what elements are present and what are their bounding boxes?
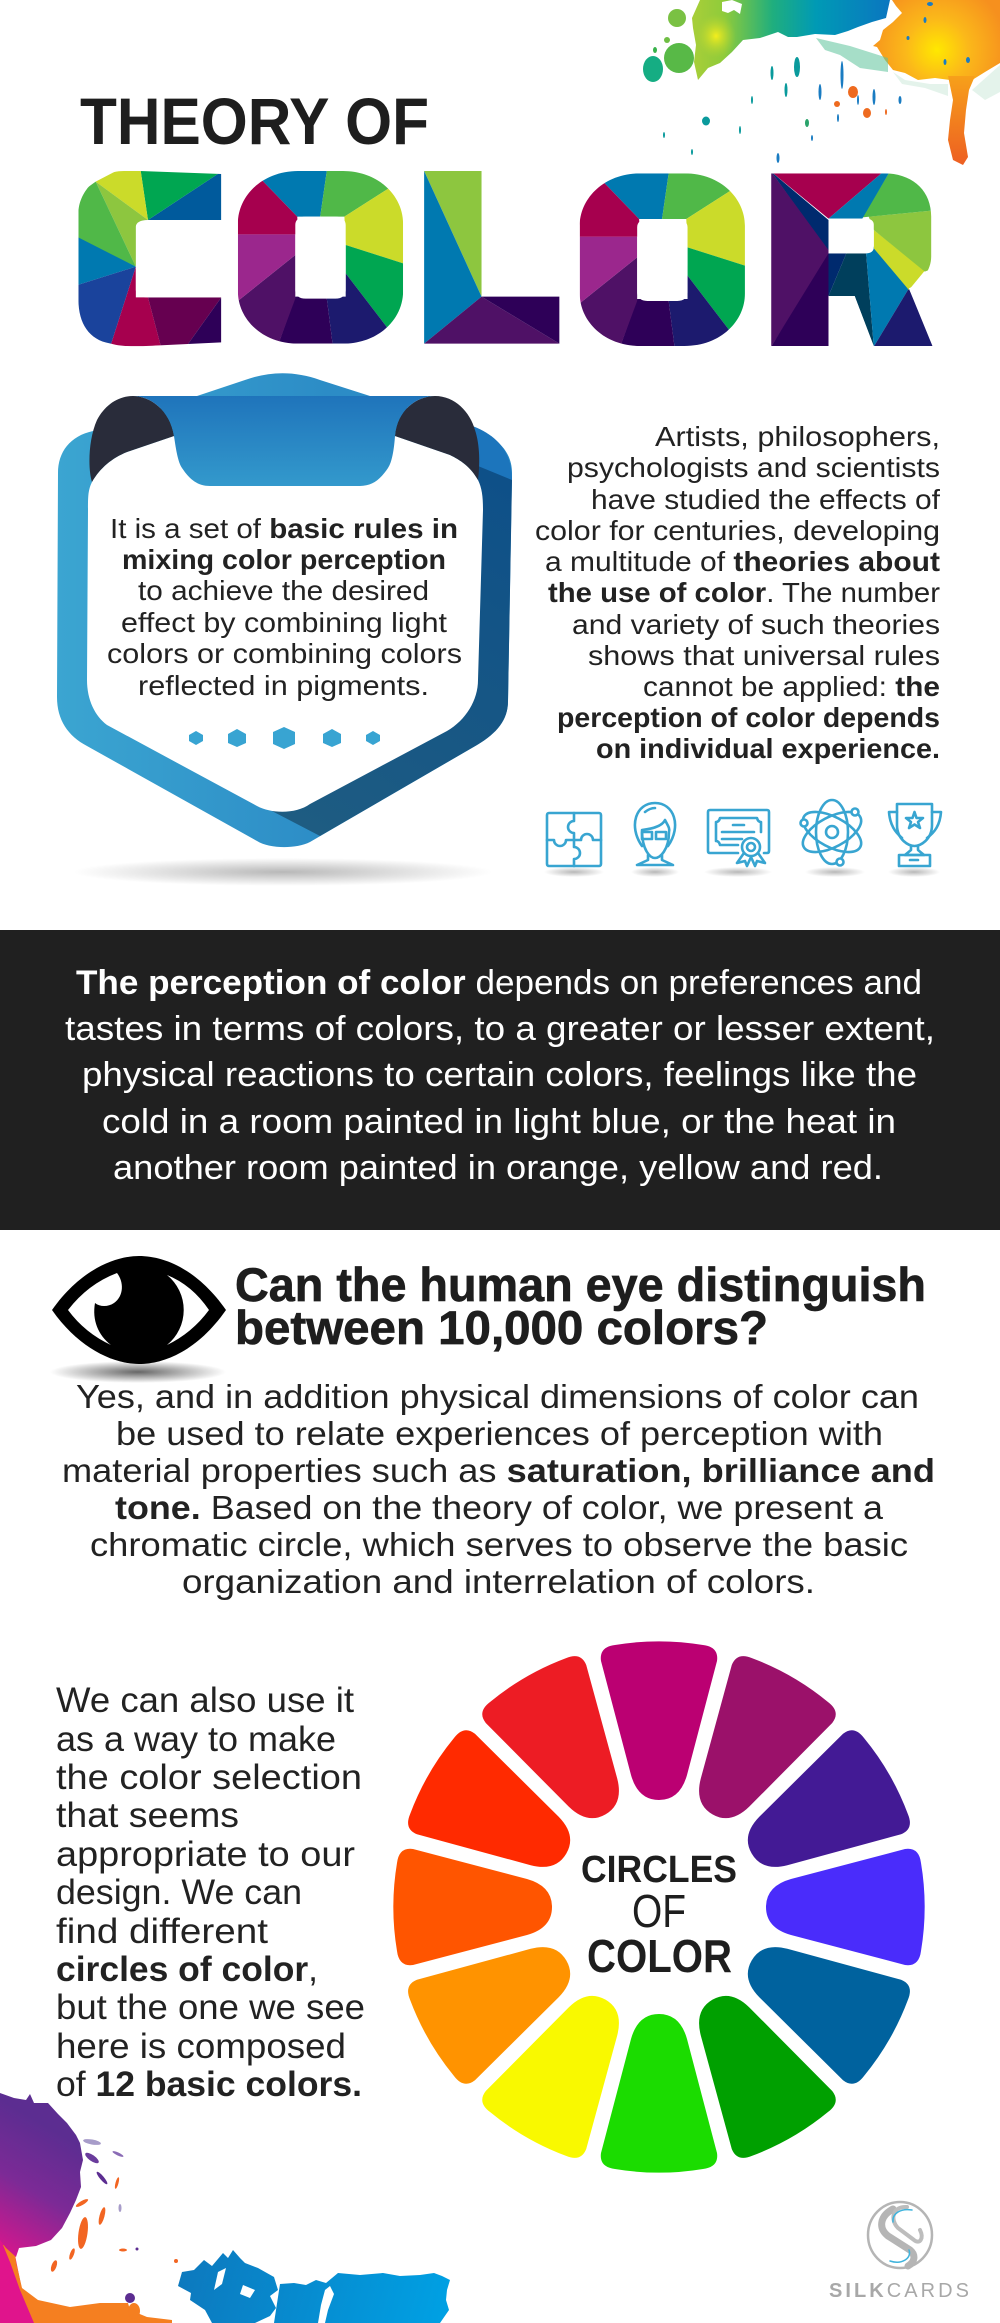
splash: speckle cloud <box>816 38 888 72</box>
wheel wedge: red orange <box>400 1724 595 1904</box>
wheel center label: COLOR <box>587 1930 732 1982</box>
logo wordmark: SILKCARDS <box>829 2280 969 2302</box>
text block: eye answer: chromatic circle, which serves to observe the basic <box>90 1526 908 1563</box>
splash: purple blob <box>0 2093 83 2257</box>
text block: circles of color description: that seems <box>56 1796 239 1835</box>
wheel wedge: green <box>601 2014 717 2173</box>
chart: color wheel <box>393 1641 925 2173</box>
splash: purple and orange droplets <box>50 2138 178 2319</box>
heading: eye question: Can the human eye distinguish <box>235 1258 926 1311</box>
badge text: mixing color perception <box>122 544 446 575</box>
band text: physical reactions to certain colors, feelings like the <box>82 1056 917 1094</box>
text block: circles of color description <box>56 1681 365 2104</box>
eye right white <box>167 1275 209 1345</box>
text block: eye answer <box>62 1378 935 1600</box>
icon: atom <box>797 800 867 866</box>
badge hexagon dots <box>189 727 380 749</box>
text block: eye answer: organization and interrelation of colors. <box>182 1563 815 1600</box>
band background <box>0 930 1000 1230</box>
badge right dark corner <box>395 396 479 480</box>
letter C <box>70 168 221 348</box>
text block: theories paragraph: and variety of such theories <box>572 609 940 640</box>
letter L <box>424 171 559 344</box>
text block: circles of color description: design. We can <box>56 1873 302 1912</box>
text block: circles of color description: appropriate to our <box>56 1835 355 1874</box>
bottom left paint splash <box>0 2093 450 2323</box>
band text: cold in a room painted in light blue, or the heat in <box>102 1103 896 1141</box>
wheel wedge: indigo <box>723 1724 918 1904</box>
badge top right highlight <box>470 425 512 480</box>
logo mark <box>868 2202 932 2268</box>
band text <box>65 964 935 1187</box>
text block: theories paragraph: on individual experience. <box>596 733 940 764</box>
band text: tastes in terms of colors, to a greater or lesser extent, <box>65 1010 935 1048</box>
heading: eye question: between 10,000 colors? <box>235 1301 768 1354</box>
splash: magenta strip <box>0 2235 35 2323</box>
text block: eye answer: tone. Based on the theory of color, we present a <box>115 1489 884 1526</box>
splash: white gaps <box>214 2268 334 2323</box>
eye left white <box>68 1273 122 1345</box>
badge outer hexagon <box>57 373 512 847</box>
splash: green to blue blob <box>692 0 890 80</box>
splash: droplets <box>643 2 970 163</box>
text block: theories paragraph: have studied the effects of <box>591 484 940 515</box>
badge inner white panel <box>87 436 483 812</box>
eye shadow <box>50 1361 226 1383</box>
title: THEORY OF: THEORY OF <box>80 84 429 158</box>
wheel center label: CIRCLES <box>581 1849 737 1891</box>
text block: eye answer: Yes, and in addition physical dimensions of color can <box>76 1378 919 1415</box>
badge text: to achieve the desired <box>138 575 429 606</box>
wheel wedge: amber <box>400 1910 595 2090</box>
text block: circles of color description: We can also use it <box>56 1681 354 1720</box>
badge text: effect by combining light <box>121 607 447 638</box>
wheel wedge: magenta <box>601 1641 717 1800</box>
letter O <box>233 168 408 347</box>
logo: Silkcards <box>829 2202 969 2302</box>
splash: pale haze <box>893 65 1000 100</box>
letter R <box>771 172 938 347</box>
text block: theories paragraph <box>535 421 940 764</box>
wheel wedge: plum <box>662 1648 842 1843</box>
heading: eye question <box>235 1258 926 1354</box>
text block: theories paragraph: color for centuries, developing <box>535 515 940 546</box>
splash: orange blob <box>873 0 1000 82</box>
badge text: colors or combining colors <box>107 638 462 669</box>
panel: dark perception band <box>0 930 1000 1230</box>
text block: theories paragraph: the use of color . The number <box>548 577 940 608</box>
badge dark right fold <box>270 466 512 836</box>
icon: puzzle <box>547 813 601 866</box>
text block: theories paragraph: shows that universal rules <box>588 640 940 671</box>
splash: blue left cluster <box>178 2250 278 2323</box>
eye outline <box>52 1256 226 1364</box>
wheel wedge: yellow <box>476 1971 656 2166</box>
text block: theories paragraph: a multitude of theories about <box>545 546 940 577</box>
badge left dark corner <box>89 396 174 482</box>
text block: circles of color description: the color selection <box>56 1758 362 1797</box>
icon: certificate <box>708 810 769 866</box>
splash: orange drip <box>948 76 975 165</box>
text block: circles of color description: of 12 basic colors. <box>56 2065 362 2104</box>
text block: circles of color description: here is composed <box>56 2027 346 2066</box>
wheel wedge: violet blue <box>766 1849 925 1965</box>
letter O second <box>575 171 750 349</box>
wheel wedge: blue <box>723 1910 918 2090</box>
text block: eye answer: be used to relate experiences of perception with <box>116 1415 883 1452</box>
text block: circles of color description: as a way to make <box>56 1720 336 1759</box>
text block: theories paragraph: Artists, philosophers, <box>655 421 940 452</box>
badge text: reflected in pigments. <box>138 670 429 701</box>
text block: eye answer: material properties such as saturation, brilliance and <box>62 1452 935 1489</box>
wheel wedge: dark green <box>662 1971 842 2166</box>
text block: circles of color description: find different <box>56 1912 268 1951</box>
text block: theories paragraph: perception of color depends <box>557 702 940 733</box>
wheel wedge: red <box>476 1648 656 1843</box>
icons row <box>544 800 941 877</box>
splash: orange mass <box>3 2245 172 2323</box>
top right paint splash <box>643 0 1000 165</box>
badge text <box>107 513 462 701</box>
wheel wedge: orange <box>393 1849 552 1965</box>
splash: blue right mass <box>274 2273 450 2323</box>
icon: person with glasses <box>635 803 675 865</box>
icon: eye <box>50 1256 226 1383</box>
text block: theories paragraph: psychologists and scientists <box>567 452 940 483</box>
title: COLOR polygon letters <box>70 168 938 349</box>
text block: circles of color description: but the one we see <box>56 1988 365 2027</box>
panel: hexagon badge <box>57 373 512 886</box>
wheel center label <box>581 1849 737 1982</box>
text block: theories paragraph: cannot be applied: the <box>643 671 940 702</box>
badge top tab <box>133 396 435 486</box>
splash: white notch <box>722 0 742 14</box>
badge text: It is a set of basic rules in <box>110 513 458 544</box>
badge ground shadow <box>73 858 493 886</box>
icon shadows <box>544 867 940 877</box>
band text: another room painted in orange, yellow and red. <box>113 1149 883 1187</box>
text block: circles of color description: circles of color, <box>56 1950 318 1989</box>
band text: The perception of color depends on preferences and <box>76 964 922 1002</box>
icon: trophy <box>889 804 941 866</box>
wheel center label: OF <box>632 1885 686 1937</box>
splash: yellow hotspot <box>696 14 736 58</box>
